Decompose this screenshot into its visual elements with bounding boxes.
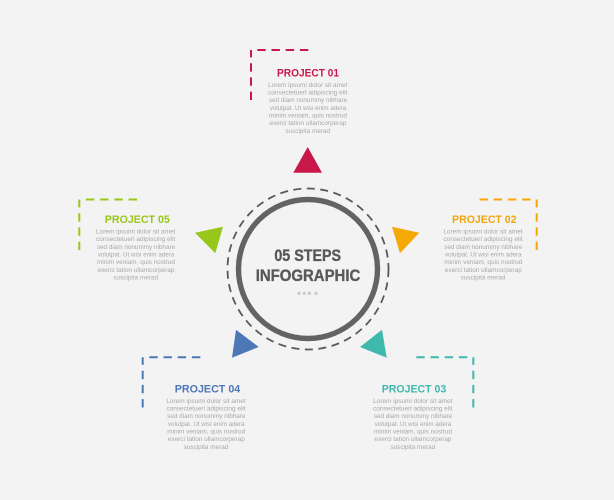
text block: exerci tation ullamcorperap bbox=[270, 120, 347, 127]
text block: volutpat. Ut wisi enim adera bbox=[445, 251, 522, 258]
solid inner ring bbox=[238, 200, 378, 338]
text block: exerci tation ullamcorperap bbox=[98, 267, 175, 274]
text block: suscipita merad bbox=[184, 444, 229, 451]
dashed corner bracket bbox=[479, 200, 537, 250]
panel: project 01 bbox=[251, 50, 348, 173]
text block: suscipita merad bbox=[285, 128, 330, 135]
text block: sed diam nonummy nibhare bbox=[444, 244, 523, 251]
text block: consectetuerl adipiscing elit bbox=[166, 406, 246, 412]
text block: minim veniam, quis nostrud bbox=[374, 428, 452, 436]
text block: sed diam nonummy nibhare bbox=[374, 413, 453, 420]
icon: orange triangle bbox=[392, 227, 419, 253]
text block bbox=[166, 398, 246, 451]
text block: consectetuerl adipiscing elit bbox=[443, 236, 523, 243]
dashed corner bracket bbox=[79, 200, 137, 250]
panel: project 02 bbox=[392, 200, 537, 281]
text block: Lorem ipsumi dolor sit amet bbox=[268, 82, 348, 89]
icon: red triangle bbox=[293, 147, 322, 173]
heading: PROJECT 03 bbox=[382, 383, 446, 395]
heading: PROJECT 02 bbox=[452, 214, 517, 226]
text block: suscipita merad bbox=[461, 274, 506, 281]
dashed corner bracket bbox=[143, 357, 201, 408]
text block: exerci tation ullamcorperap bbox=[168, 436, 245, 443]
panel: project 03 bbox=[360, 330, 473, 451]
heading: PROJECT 04 bbox=[175, 383, 241, 395]
text block: volutpat. Ut wisi enim adera bbox=[375, 421, 452, 428]
heading: PROJECT 05 bbox=[105, 214, 170, 226]
hub title bbox=[256, 247, 360, 285]
dashed corner bracket bbox=[416, 357, 473, 408]
text block: consectetuerl adipiscing elit bbox=[373, 406, 453, 412]
central circle hub bbox=[228, 188, 388, 350]
text block: suscipita merad bbox=[113, 274, 158, 281]
text block: Lorem ipsumi dolor sit amet bbox=[96, 228, 176, 235]
text block: consectetuerl adipiscing elit bbox=[268, 90, 348, 96]
text block: exerci tation ullamcorperap bbox=[445, 267, 522, 274]
text block bbox=[443, 228, 523, 281]
panel: project 04 bbox=[143, 330, 259, 451]
text block: minim veniam, quis nostrud bbox=[444, 259, 523, 266]
icon: green triangle bbox=[195, 227, 223, 253]
hub title: INFOGRAPHIC bbox=[256, 267, 360, 285]
text block: exerci tation ullamcorperap bbox=[374, 436, 452, 443]
text block: Lorem ipsumi dolor sit amet bbox=[166, 398, 246, 405]
icon: teal triangle bbox=[360, 330, 387, 358]
text block: Lorem ipsumi dolor sit amet bbox=[443, 228, 523, 235]
text block: sed diam nonummy nibhare bbox=[269, 97, 348, 104]
text block: volutpat. Ut wisi enim adera bbox=[98, 251, 175, 258]
text block bbox=[268, 82, 348, 135]
text block: sed diam nonummy nibhare bbox=[167, 413, 246, 420]
heading: PROJECT 01 bbox=[277, 67, 339, 79]
text block: suscipita merad bbox=[390, 444, 436, 451]
dashed outer ring bbox=[228, 188, 388, 350]
text block: Lorem ipsumi dolor sit amet bbox=[373, 398, 453, 405]
text block bbox=[373, 398, 453, 451]
icon: blue triangle bbox=[232, 330, 259, 358]
dashed corner bracket bbox=[251, 50, 309, 100]
text block: volutpat. Ut wisi enim adera bbox=[270, 105, 347, 112]
text block: minim veniam, quis nostrud bbox=[269, 112, 347, 120]
hub title: 05 STEPS bbox=[274, 247, 341, 265]
text block: minim veniam, quis nostrud bbox=[97, 259, 175, 266]
panel: project 05 bbox=[79, 200, 223, 281]
text block: minim veniam, quis nostrud bbox=[167, 428, 246, 436]
text block: volutpat. Ut wisi enim adera bbox=[168, 421, 245, 428]
text block: sed diam nonummy nibhare bbox=[97, 244, 176, 251]
text block: consectetuerl adipiscing elit bbox=[96, 236, 176, 243]
hub dots bbox=[298, 292, 318, 295]
text block bbox=[96, 228, 176, 281]
